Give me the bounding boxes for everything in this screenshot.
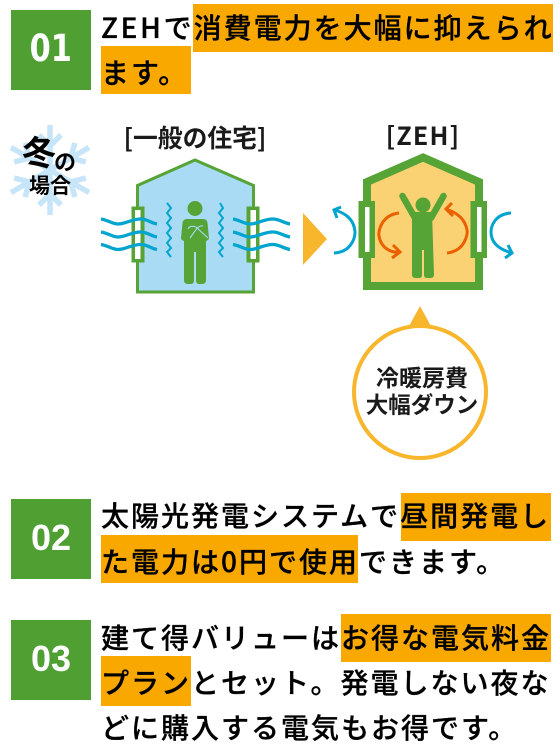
number badge 01: 01 bbox=[30, 27, 72, 70]
number badge 02: 02 bbox=[31, 517, 71, 558]
number badge 03 bbox=[11, 620, 91, 700]
warm circulation arrows bbox=[379, 203, 467, 258]
number badge 01 bbox=[11, 10, 91, 90]
chill zigzag right bbox=[219, 203, 223, 257]
arrow: to ZEH bbox=[303, 213, 327, 265]
text block 02 bbox=[101, 493, 551, 583]
heading: ZEH: [ZEH] bbox=[386, 117, 460, 153]
house: ordinary bbox=[101, 160, 290, 292]
text block 01: ます。 bbox=[101, 52, 188, 92]
number badge 03: 03 bbox=[31, 638, 71, 679]
person shivering bbox=[181, 201, 209, 284]
text block 03: プランとセット。発電しない夜な bbox=[101, 662, 550, 702]
diagram: winter comparison bbox=[10, 117, 514, 460]
callout: heating and cooling cost down: 大幅ダウン bbox=[366, 388, 478, 420]
heat loss arrows left bbox=[334, 207, 355, 253]
icon: snowflake with winter label: 場合 bbox=[29, 170, 71, 200]
cold air waves right bbox=[233, 219, 290, 250]
chill zigzag left bbox=[167, 203, 171, 257]
text block 02: 太陽光発電システムで昼間発電し bbox=[101, 495, 550, 535]
heat loss arrows right bbox=[491, 213, 512, 258]
text block 01: ZEHで消費電力を大幅に抑えられ bbox=[101, 7, 554, 47]
text block 01 bbox=[101, 4, 554, 94]
icon: snowflake with winter label: 冬 bbox=[22, 126, 56, 175]
person with raised arms bbox=[402, 196, 444, 278]
callout: heating and cooling cost down: 冷暖房費 bbox=[376, 359, 468, 393]
text block 03: どに購入する電気もお得です。 bbox=[101, 707, 518, 747]
text block 03: 建て得バリューはお得な電気料金 bbox=[101, 617, 551, 657]
text block 02: た電力は0円で使用できます。 bbox=[101, 541, 506, 581]
left window bbox=[132, 206, 144, 262]
icon: snowflake with winter label bbox=[6, 125, 94, 215]
heading: ordinary house: [一般の住宅] bbox=[124, 119, 266, 155]
cold air waves left bbox=[101, 219, 157, 250]
number badge 02 bbox=[11, 499, 91, 579]
house: ZEH bbox=[334, 158, 512, 286]
callout: heating and cooling cost down bbox=[354, 306, 486, 458]
right window bbox=[246, 206, 260, 262]
icon: snowflake with winter label: の bbox=[54, 145, 76, 177]
left window bbox=[358, 201, 375, 258]
right window bbox=[470, 201, 487, 258]
